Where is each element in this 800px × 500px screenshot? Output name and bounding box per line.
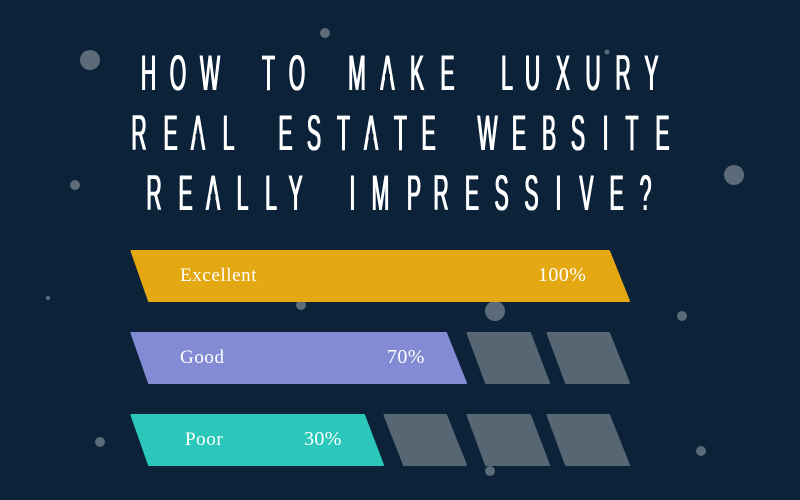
good: empty segments <box>468 333 629 383</box>
title: HOW TO MAKE LUXURY <box>141 46 659 102</box>
bar: poor: Poor <box>185 429 223 450</box>
bar: good: Good <box>180 347 225 368</box>
bar: excellent <box>132 251 629 301</box>
poor: empty segments <box>384 415 629 465</box>
bar: good <box>132 333 466 383</box>
bar: poor <box>132 415 383 465</box>
title: REAL ESTATE WEBSITE <box>131 106 670 162</box>
bar: poor: 30% <box>304 428 342 450</box>
bar: excellent: 100% <box>538 264 586 286</box>
title <box>131 46 670 222</box>
background dots <box>46 28 744 476</box>
bar: good: 70% <box>387 346 425 368</box>
title: REALLY IMPRESSIVE? <box>146 166 651 222</box>
bar: excellent: Excellent <box>180 265 257 286</box>
